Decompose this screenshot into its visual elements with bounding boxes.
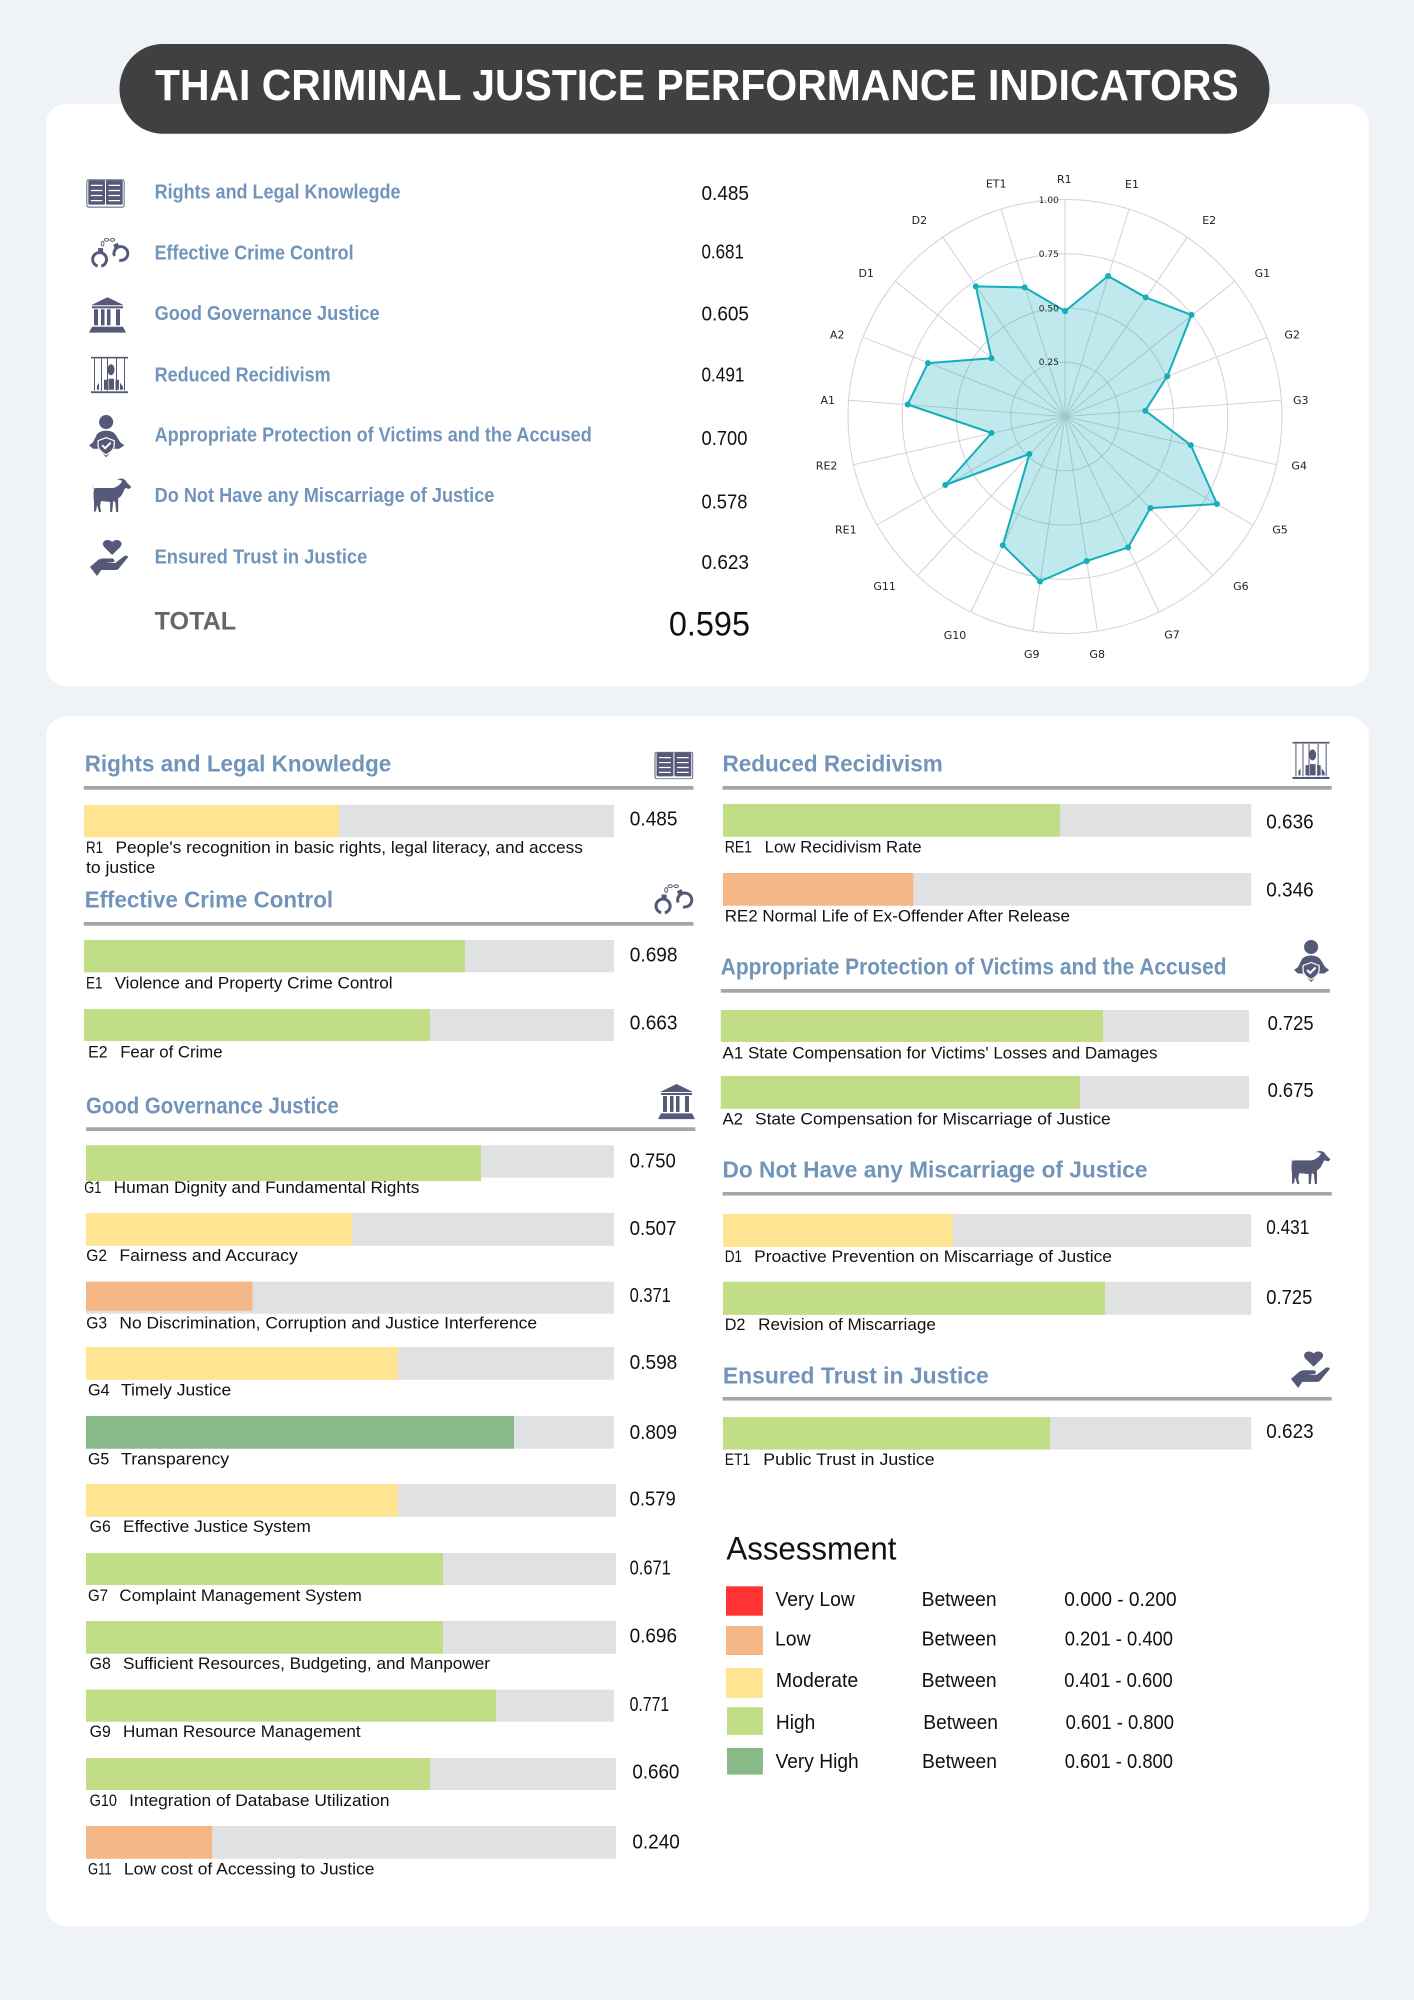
indicator G9	[86, 1690, 669, 1741]
indicator E2	[84, 1009, 678, 1061]
indicator G11: G11	[88, 1859, 112, 1878]
indicator RE1: Low Recidivism Rate	[765, 837, 922, 856]
indicator D2: Revision of Miscarriage	[758, 1315, 936, 1334]
radar series polygon	[908, 276, 1217, 582]
overview row: Ensured Trust in Justice	[90, 540, 749, 576]
overview row: Good Governance Justice	[89, 297, 749, 333]
icon: protected person	[1294, 940, 1329, 982]
radar axis labels: RE2	[816, 459, 837, 472]
total value: 0.595	[669, 606, 750, 644]
radar axis labels: G4	[1291, 459, 1307, 472]
radar axis labels: E1	[1125, 178, 1139, 191]
overview row: Reduced Recidivism	[91, 357, 744, 393]
row label: Ensured Trust in Justice	[155, 545, 367, 568]
legend row: high: Between	[923, 1712, 998, 1734]
legend row: very high	[727, 1748, 1173, 1775]
radar axis labels: E2	[1202, 214, 1216, 227]
indicator G11	[86, 1826, 680, 1878]
section: Reduced Recidivism	[722, 742, 1332, 925]
indicator RE1: 0.636	[1266, 810, 1314, 833]
section: Ensured Trust in Justice	[722, 1352, 1332, 1469]
indicator G8: Sufficient Resources, Budgeting, and Manpower	[123, 1654, 490, 1673]
indicator G9: 0.771	[630, 1693, 669, 1716]
indicator G3	[86, 1282, 671, 1332]
indicator D1: 0.431	[1266, 1216, 1309, 1239]
indicator A2: A2	[722, 1109, 743, 1128]
indicator ET1	[723, 1417, 1314, 1469]
indicator R1: to justice	[86, 858, 155, 877]
legend row: moderate: 0.401 - 0.600	[1064, 1670, 1173, 1692]
indicator G3: 0.371	[630, 1284, 671, 1307]
indicator G8	[86, 1621, 677, 1673]
legend row: very high: Between	[922, 1751, 997, 1773]
indicator G7: G7	[88, 1586, 108, 1605]
overview row: Appropriate Protection	[89, 415, 747, 457]
heading: Effective Crime Control	[85, 887, 333, 913]
indicator G2: G2	[86, 1246, 107, 1265]
icon: handcuffs	[91, 238, 130, 268]
radar axis labels: ET1	[986, 177, 1007, 190]
radar chart	[816, 173, 1309, 661]
icon: book	[655, 752, 693, 779]
legend: assessment	[726, 1531, 1177, 1775]
indicator R1: 0.485	[630, 808, 678, 831]
indicator E1: 0.698	[630, 944, 678, 967]
icon: goat	[92, 478, 131, 512]
row value: 0.485	[702, 182, 749, 205]
radar scale labels: 0.25	[1039, 358, 1059, 368]
row label: Rights and Legal Knowlegde	[155, 181, 400, 204]
row label: Do Not Have any Miscarriage of Justice	[155, 484, 494, 507]
legend row: low	[726, 1626, 1173, 1655]
heading: Appropriate Protection of Victims and the Accused	[721, 953, 1226, 979]
indicator G6: G6	[90, 1517, 111, 1536]
indicator A2	[721, 1076, 1314, 1128]
indicator ET1: ET1	[725, 1450, 750, 1469]
indicator G6: 0.579	[630, 1488, 676, 1511]
icon: jail	[1292, 742, 1330, 779]
indicator RE1: RE1	[725, 837, 752, 856]
indicator D1: D1	[725, 1247, 742, 1266]
indicator G3: G3	[86, 1313, 107, 1332]
section: Rights and Legal Knowledge	[84, 751, 694, 877]
indicator G9: G9	[90, 1722, 111, 1741]
section: Effective Crime Control	[84, 885, 694, 1061]
indicator G7: 0.671	[630, 1557, 671, 1580]
indicator G7: Complaint Management System	[119, 1586, 362, 1605]
indicator E1: Violence and Property Crime Control	[115, 973, 393, 992]
radar axis labels: D1	[858, 267, 874, 280]
indicator G4	[86, 1347, 677, 1399]
indicator G5: G5	[88, 1449, 109, 1468]
indicator G2: Fairness and Accuracy	[119, 1246, 298, 1265]
legend row: high: High	[776, 1712, 815, 1734]
section: Good Governance Justice	[84, 1084, 695, 1878]
indicator A1: 0.725	[1268, 1012, 1314, 1035]
indicator ET1: Public Trust in Justice	[763, 1450, 935, 1469]
icon: goat	[1290, 1151, 1330, 1184]
row value: 0.681	[702, 240, 744, 264]
indicator A1: A1 State Compensation for Victims' Losses and Damages	[722, 1043, 1158, 1062]
indicator R1	[84, 805, 678, 877]
indicator G10: Integration of Database Utilization	[129, 1791, 390, 1810]
legend row: moderate	[726, 1668, 1173, 1698]
radar axis labels: G7	[1164, 628, 1180, 642]
legend title: Assessment	[726, 1531, 897, 1567]
legend row: moderate: Moderate	[776, 1670, 858, 1692]
indicator G6: Effective Justice System	[123, 1517, 311, 1536]
icon: handcuffs	[654, 885, 694, 915]
row label: Appropriate Protection of Victims and the Accused	[155, 424, 592, 446]
indicator G5: Transparency	[121, 1449, 230, 1468]
indicator D2	[723, 1282, 1312, 1334]
legend row: high	[727, 1707, 1174, 1735]
indicator ET1: 0.623	[1266, 1420, 1314, 1443]
indicator G1: 0.750	[630, 1150, 676, 1173]
legend row: low: 0.201 - 0.400	[1065, 1628, 1173, 1650]
indicator G7	[86, 1553, 671, 1605]
radar scale labels: 0.75	[1039, 250, 1059, 260]
radar axis labels: D2	[912, 214, 927, 227]
indicator G11: 0.240	[632, 1831, 680, 1854]
section: Appropriate Protection of Victims and the Accused	[721, 940, 1330, 1128]
heading: Reduced Recidivism	[722, 751, 943, 777]
legend row: very high: Very High	[776, 1751, 859, 1773]
total row	[155, 606, 750, 644]
legend row: very low	[726, 1586, 1177, 1616]
indicator E2: E2	[88, 1042, 108, 1061]
row label: Good Governance Justice	[155, 302, 380, 325]
indicator G8: 0.696	[630, 1625, 677, 1648]
row value: 0.623	[702, 551, 749, 574]
indicator G1: Human Dignity and Fundamental Rights	[114, 1178, 419, 1197]
total label: TOTAL	[155, 608, 236, 636]
indicator G5: 0.809	[630, 1421, 677, 1444]
row label: Reduced Recidivism	[155, 363, 331, 386]
indicator A2: State Compensation for Miscarriage of Justice	[755, 1109, 1111, 1128]
indicator R1: R1	[86, 838, 103, 857]
legend row: moderate: Between	[922, 1670, 997, 1692]
section: Do Not Have any Miscarriage of Justice	[722, 1151, 1332, 1334]
legend row: very low: Very Low	[776, 1589, 855, 1611]
radar scale labels	[1039, 196, 1059, 368]
panel: indicator details	[46, 716, 1369, 1926]
indicator G5	[86, 1416, 677, 1468]
heading: Good Governance Justice	[86, 1092, 339, 1118]
indicator E2: Fear of Crime	[120, 1042, 223, 1061]
radar axis labels: G9	[1024, 648, 1040, 661]
heading: Ensured Trust in Justice	[723, 1363, 989, 1389]
indicator G4: G4	[88, 1380, 110, 1399]
radar axis labels: G3	[1293, 394, 1309, 407]
icon: hand with heart	[1291, 1352, 1330, 1388]
icon: courthouse	[89, 297, 126, 333]
indicator E1: E1	[86, 973, 102, 992]
indicator G3: No Discrimination, Corruption and Justice Interference	[119, 1313, 537, 1332]
radar axis labels: G11	[873, 580, 896, 593]
radar axis labels: G5	[1272, 524, 1288, 536]
radar scale labels: 0.50	[1039, 305, 1059, 315]
overview row: Effective Crime Control	[91, 238, 744, 268]
indicator G9: Human Resource Management	[123, 1722, 361, 1741]
row value: 0.605	[702, 302, 749, 326]
radar axis labels: G2	[1284, 329, 1300, 342]
radar axis labels	[816, 173, 1309, 661]
indicator D2: 0.725	[1266, 1286, 1312, 1309]
radar axis labels: A1	[821, 394, 835, 407]
radar axis labels: R1	[1057, 173, 1072, 186]
legend row: very high: 0.601 - 0.800	[1065, 1751, 1173, 1773]
icon: courthouse	[658, 1084, 695, 1119]
indicator G1	[84, 1145, 676, 1197]
indicator G11: Low cost of Accessing to Justice	[124, 1859, 375, 1878]
radar axis labels: G6	[1233, 580, 1249, 593]
indicator RE2	[723, 873, 1314, 925]
indicator G1: G1	[84, 1178, 101, 1197]
overview row: Rights and Legal Knowledge	[87, 180, 749, 207]
indicator RE2: RE2 Normal Life of Ex-Offender After Release	[725, 906, 1070, 925]
radar axis labels: G8	[1089, 648, 1105, 661]
legend row: very low: 0.000 - 0.200	[1064, 1589, 1177, 1611]
title banner	[120, 44, 1270, 134]
legend row: low: Low	[775, 1628, 811, 1650]
radar series points	[905, 273, 1220, 584]
icon: book	[87, 180, 124, 207]
row value: 0.578	[702, 490, 747, 514]
radar scale labels: 1.00	[1039, 196, 1059, 206]
indicator G10: G10	[90, 1791, 117, 1810]
indicator A2: 0.675	[1268, 1079, 1314, 1102]
legend row: very low: Between	[922, 1589, 997, 1611]
indicator G6	[86, 1484, 676, 1536]
indicator G2: 0.507	[630, 1217, 676, 1240]
radar axis labels: G10	[944, 629, 966, 642]
indicator RE2: 0.346	[1266, 879, 1314, 902]
panel: overview	[46, 104, 1369, 686]
radar axis labels: A2	[830, 329, 844, 342]
legend row: low: Between	[922, 1628, 997, 1650]
heading: Rights and Legal Knowledge	[85, 751, 391, 777]
row value: 0.700	[702, 427, 747, 450]
heading: Do Not Have any Miscarriage of Justice	[722, 1156, 1148, 1182]
row label: Effective Crime Control	[155, 241, 354, 264]
icon: jail	[91, 357, 128, 393]
title: THAI CRIMINAL JUSTICE PERFORMANCE INDICATORS	[155, 61, 1239, 110]
icon: hand with heart	[90, 540, 128, 576]
indicator E1	[84, 940, 678, 992]
indicator G2	[86, 1213, 676, 1265]
indicator D1: Proactive Prevention on Miscarriage of Justice	[754, 1247, 1112, 1266]
indicator G10: 0.660	[632, 1761, 679, 1784]
indicator RE1	[723, 804, 1314, 856]
indicator G4: 0.598	[630, 1351, 677, 1374]
legend row: high: 0.601 - 0.800	[1066, 1712, 1174, 1734]
radar axis labels: G1	[1255, 267, 1270, 280]
indicator D2: D2	[725, 1315, 746, 1334]
indicator D1	[723, 1214, 1309, 1266]
overview row: Miscarriage of Justice	[92, 478, 747, 514]
indicator A1	[721, 1010, 1314, 1062]
indicator G4: Timely Justice	[121, 1380, 231, 1399]
indicator E2: 0.663	[630, 1012, 678, 1035]
indicator G8: G8	[90, 1654, 111, 1673]
indicator G10	[86, 1758, 679, 1810]
indicator R1: People's recognition in basic rights, legal literacy, and access	[116, 838, 583, 857]
icon: protected person	[89, 415, 124, 457]
radar axis labels: RE1	[835, 524, 857, 536]
row value: 0.491	[702, 363, 744, 386]
